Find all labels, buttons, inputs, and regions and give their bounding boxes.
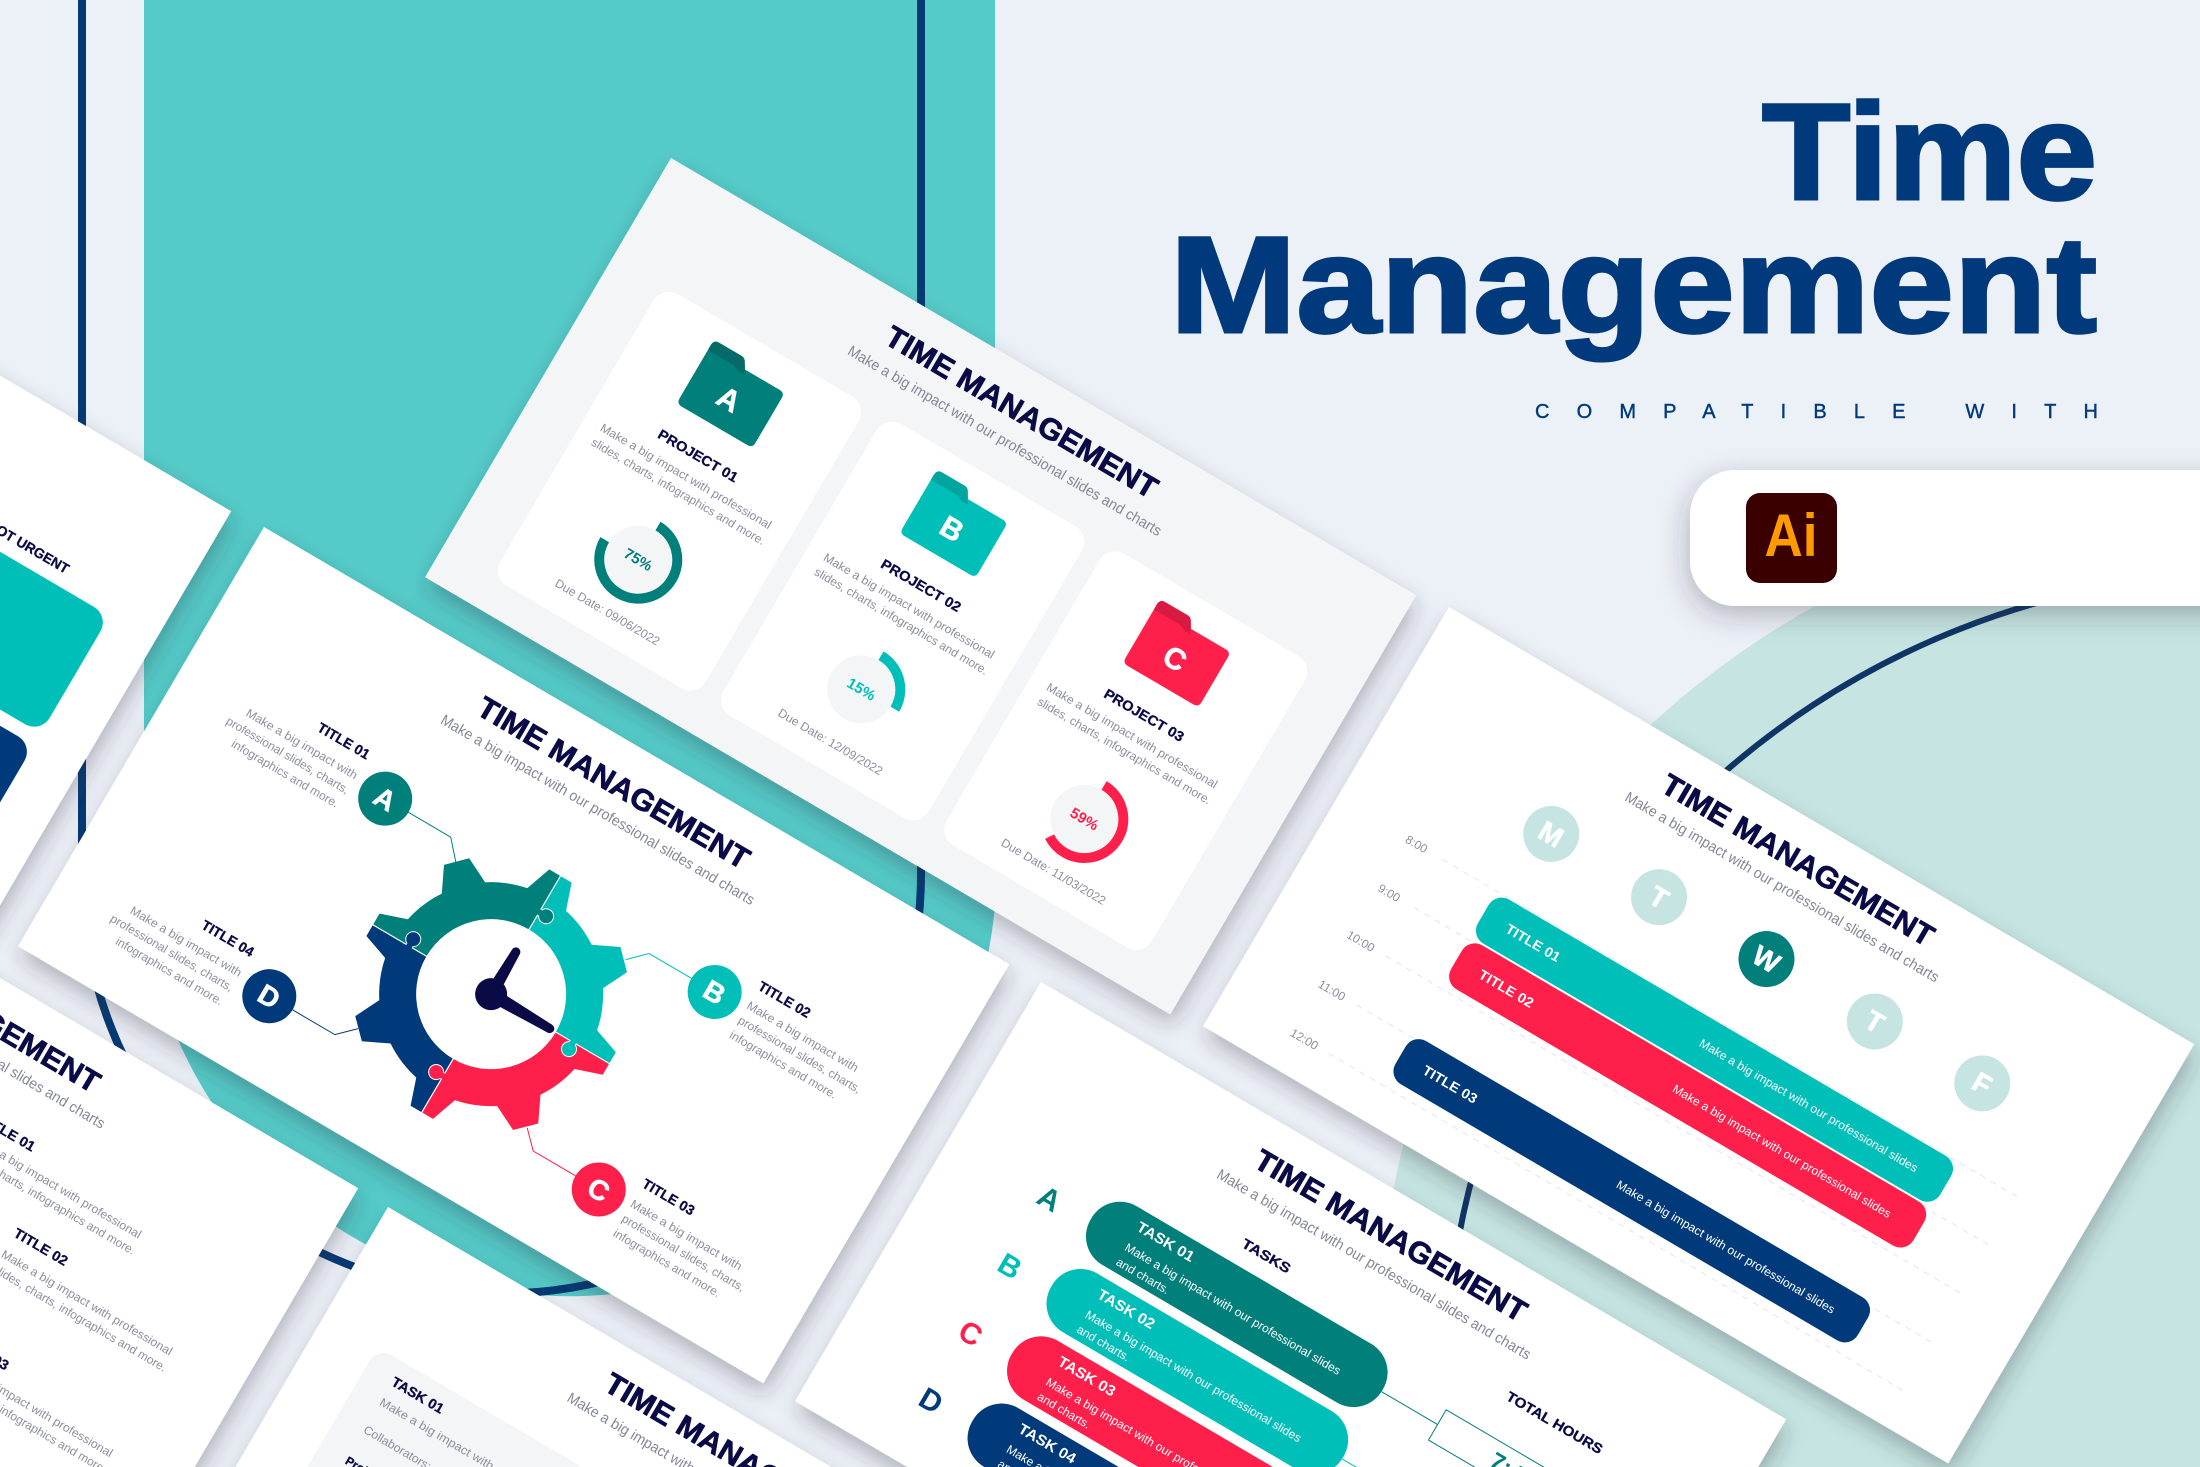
row letters: B [992,1247,1027,1286]
compatibility pill [1690,470,2200,606]
card: project 01 [491,285,868,697]
day circles: T [1859,1004,1890,1040]
slide title: TIME MANAGEMENT [471,691,755,876]
slide background [0,751,358,1467]
row letters: A [1031,1180,1067,1219]
text: project 02 [812,529,1012,678]
icon: folder B: B [934,510,969,549]
icon: folder B [900,469,1013,578]
text: project 03: Make a big impact with professional [1044,680,1220,791]
text: title 01 [215,678,373,812]
text: project 01: slides, charts, infographics and more. [589,435,768,548]
badge D: D [252,978,286,1015]
slide title: Make a big impact with our professional slides and charts [438,712,758,909]
text: project 02: PROJECT 02 [878,556,964,615]
pill: task 03: and charts. [1035,1389,1093,1432]
navy arc on pale circle [1445,572,2200,1467]
text: title 04: professional slides, charts, [108,911,236,994]
card: project 03 [938,545,1314,957]
main title [1170,76,2097,362]
slide background [142,1207,1133,1467]
bar: title 03: Make a big impact with our professional slides [1614,1177,1837,1317]
bar: title 02: Make a big impact with our professional slides [1670,1082,1894,1221]
time axis labels: 10:00 [1344,928,1377,955]
tasks heading: TASKS [1239,1235,1294,1276]
slide background [425,158,1416,1014]
day circles: T [1644,880,1674,915]
text: project 03 [1035,658,1235,807]
bar: title 01: TITLE 01 [1503,920,1564,965]
slide: projects [425,158,1416,1014]
bar: title 02: TITLE 02 [1476,966,1537,1011]
bar: title 02 [1444,938,1932,1253]
text: title 03 [611,1175,768,1309]
icon: Adobe Illustrator: Ai [1764,502,1818,569]
main title: Management [1170,209,2097,362]
pill: task 03 [995,1324,1321,1467]
card: project 02 [714,415,1091,827]
slide background [1203,607,2194,1463]
text: title 02: Make a big impact with [744,998,861,1075]
row letters: C [952,1314,988,1354]
pill: task 02: and charts. [1074,1322,1133,1364]
time axis labels: 11:00 [1316,977,1348,1004]
donut: 59%: 59% [1067,805,1101,834]
pill: task 01: and charts. [1114,1255,1172,1297]
day circles [1513,793,2021,1124]
row letters: D [913,1382,948,1421]
slide title: TIME MANAGEMENT [1655,768,1940,953]
main title: Time [1762,76,2097,229]
slide background [0,74,231,930]
text: project 03: PROJECT 03 [1101,685,1187,745]
pale teal circle [1379,500,2200,1467]
total hours heading: TOTAL HOURS [1504,1388,1606,1457]
badge B [678,955,752,1029]
text: project 01: PROJECT 01 [655,426,741,485]
text: project 01 [589,399,789,548]
slide title: Make a big impact with our professional slides and charts [845,343,1165,540]
list item 02: Make a big impact with professional [0,1247,175,1358]
pill: task 02: TASK 02 [1094,1286,1158,1333]
text: title 01: TITLE 01 [315,719,373,762]
pill: task 03: TASK 03 [1055,1353,1118,1400]
bar: title 01 [1470,892,1959,1207]
pill: task 01 [1074,1190,1400,1419]
badge C: C [582,1171,615,1208]
navy outline of teal backdrop [82,0,921,1294]
day circles: M [1533,815,1569,854]
slide: gear clock [18,527,1009,1383]
due date 03: Due Date: 11/03/2022 [999,836,1109,908]
gear clock diagram [355,858,627,1130]
donut: 75% [585,506,692,613]
badge A [348,762,422,836]
text: title 03: Make a big impact with [628,1197,745,1273]
text: title 03: infographics and more. [611,1226,723,1300]
icon: Adobe Illustrator [1746,493,1837,583]
donut: 59% [1031,766,1138,872]
bar: title 03 [1388,1034,1876,1348]
slide background [18,527,1009,1383]
slide: tasks and hours [795,982,1786,1467]
text: title 01: infographics and more. [229,737,341,810]
badge B: B [698,974,731,1011]
slide title: TIME MANAGEMENT [879,320,1163,505]
due date 01: Due Date: 09/06/2022 [553,576,663,649]
icon: folder C: C [1157,640,1192,679]
pill: task 02: Make a big impact with our professional slides [1083,1308,1304,1445]
slide: task detail [142,1207,1133,1467]
slide title: Make a big impact with our professional slides and charts [1622,789,1942,986]
icon: folder A: A [711,380,746,420]
pill: task 02 [1034,1257,1360,1467]
pill: task 04: TASK 04 [1015,1421,1079,1467]
task panel: Make a big impact with [377,1395,496,1467]
slide: weekly schedule [1203,607,2194,1463]
text: title 01: professional slides, charts, [224,714,352,797]
clock hands [469,940,581,1045]
day circles: F [1967,1066,1997,1101]
time axis labels [1287,831,1435,1053]
text: title 04: infographics and more. [113,934,225,1008]
connector lines [293,812,691,1176]
slide: not urgent matrix [0,74,231,930]
text: project 02: Make a big impact with professional [821,550,997,662]
donut: 75%: 75% [621,545,655,575]
badge A: A [368,781,402,818]
icon: folder A [677,340,790,448]
text: project 01: Make a big impact with professional [598,421,774,532]
hours box [1428,1410,1614,1467]
text: title 03: TITLE 03 [640,1175,698,1219]
badge C [562,1153,636,1226]
text: title 04: TITLE 04 [199,917,257,960]
slide title: TIME MANAGEMENT [1248,1144,1532,1329]
text: title 04: Make a big impact with [128,903,244,980]
pill: task 01: TASK 01 [1134,1219,1197,1266]
list item 03 [0,1328,130,1467]
bar: title 03: TITLE 03 [1420,1062,1481,1107]
row letters [913,1180,1067,1421]
text: title 02: infographics and more. [727,1028,839,1102]
day circles: W [1747,939,1786,980]
teal backdrop shape [144,0,995,1296]
text: title 01: Make a big impact with [244,706,360,782]
slide title: Make a big impact with our professional slides and charts [1214,1166,1534,1363]
donut: 15% [808,636,915,743]
time axis labels: 9:00 [1375,881,1403,905]
time axis labels: 12:00 [1288,1026,1321,1053]
text: project 02: slides, charts, infographics and more. [812,565,991,678]
slide: titled list [0,751,358,1467]
text: project 03: slides, charts, infographics and more. [1035,695,1214,807]
badge D [232,959,306,1033]
navy box [0,587,34,864]
text: title 04 [99,875,257,1009]
text: title 02: TITLE 02 [755,978,814,1021]
task panel [209,1347,589,1467]
pill: task 04 [955,1391,1281,1467]
teal box [0,458,109,733]
bar: title 01: Make a big impact with our professional slides [1697,1036,1920,1175]
donut: 15%: 15% [844,675,878,705]
icon: folder C [1123,599,1236,707]
connector lines [1342,1392,1438,1467]
slide background [795,982,1786,1467]
subtitle: compatible with: COMPATIBLE WITH [1535,401,2098,423]
pill: task 01: Make a big impact with our professional slides [1122,1240,1343,1378]
time axis labels: 8:00 [1403,832,1430,856]
due date 02: Due Date: 12/09/2022 [776,706,886,778]
list item 02: TITLE 02 [11,1225,71,1269]
list item 02 [0,1225,191,1375]
task panel: TASK 01 [389,1373,447,1417]
text: title 03: professional slides, charts, [619,1212,747,1294]
puzzle knobs [351,854,631,1134]
list item 01 [0,1110,158,1258]
text: title 02: professional slides, charts, [736,1013,864,1096]
text: title 02 [727,978,884,1111]
